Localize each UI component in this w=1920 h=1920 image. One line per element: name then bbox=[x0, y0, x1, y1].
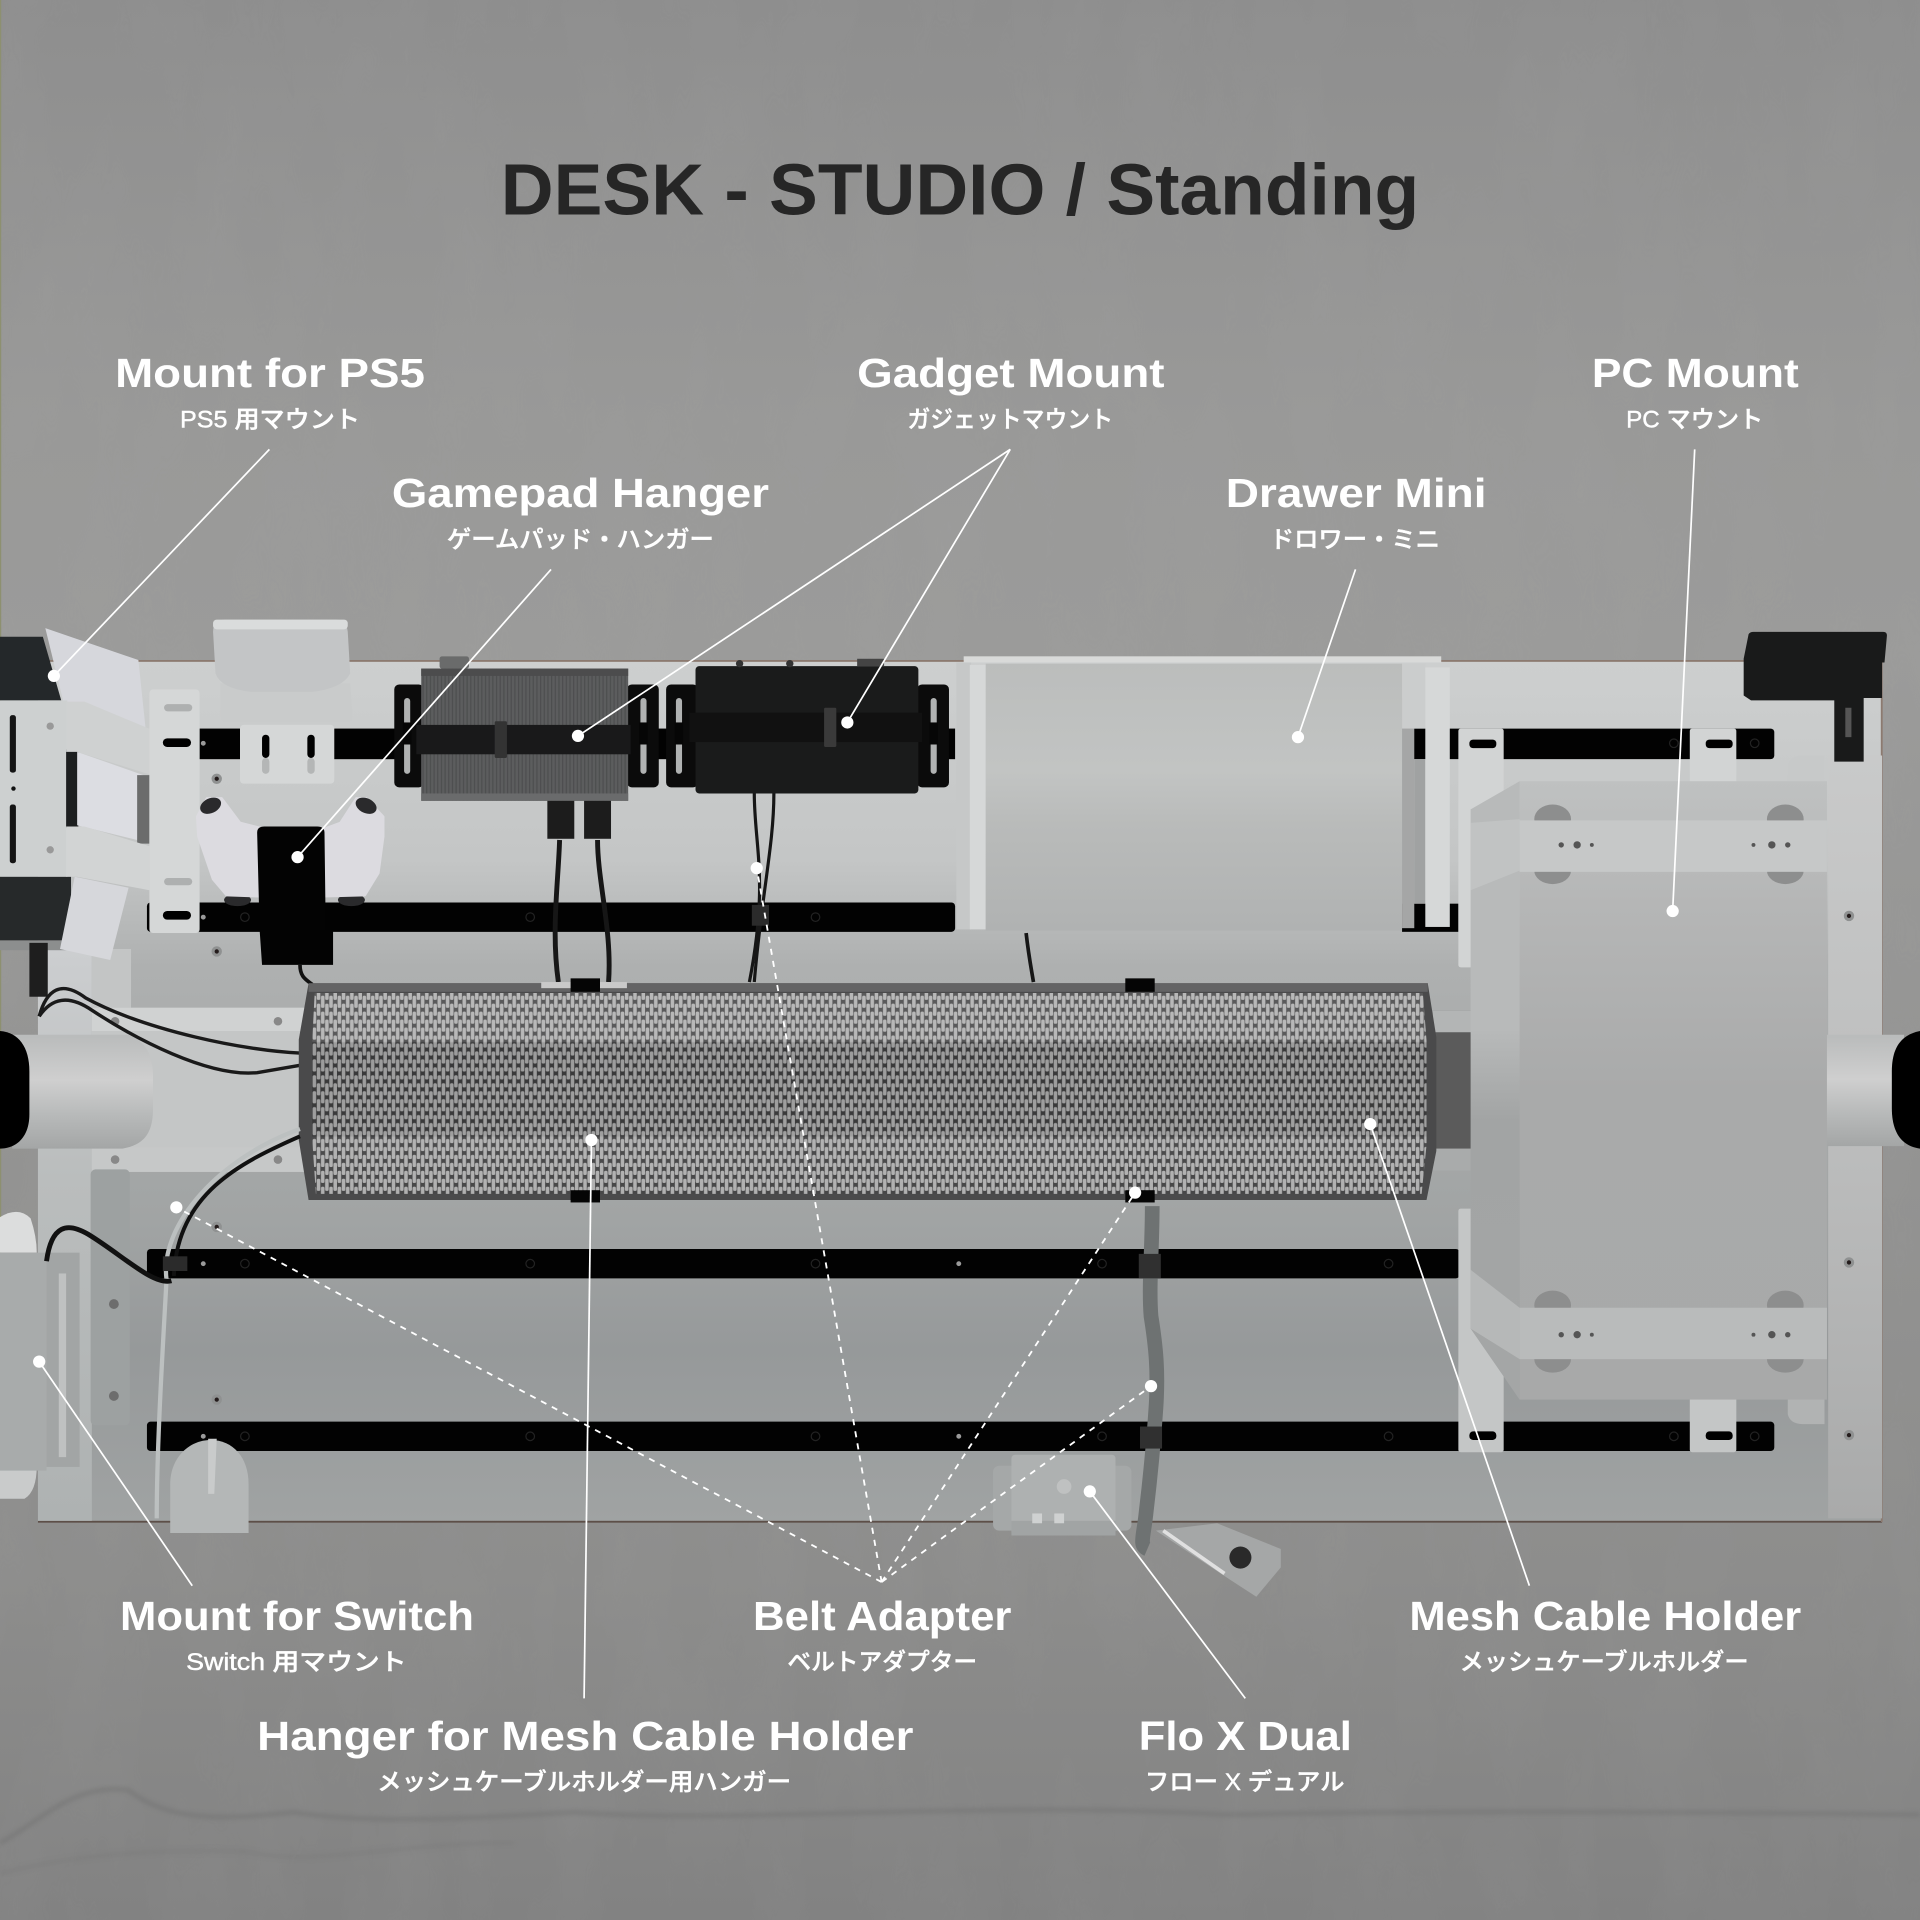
label: Gadget Mount: Gadget Mount bbox=[857, 350, 1164, 396]
label: PC Mount: PC マウント bbox=[1626, 406, 1763, 433]
icon: drawer mini bbox=[956, 656, 1450, 931]
label: Hanger for Mesh Cable Holder bbox=[257, 1713, 914, 1796]
label: Gadget Mount: ガジェットマウント bbox=[907, 406, 1113, 433]
label: Drawer Mini: ドロワー・ミニ bbox=[1270, 526, 1440, 553]
icon: top wall bracket bbox=[213, 620, 353, 784]
label: Flo X Dual bbox=[1139, 1713, 1352, 1796]
label: Mesh Cable Holder bbox=[1409, 1593, 1802, 1676]
icon: mounting plate with keyholes bbox=[149, 689, 200, 933]
label: Belt Adapter: ベルトアダプター bbox=[787, 1649, 977, 1676]
label: PC Mount bbox=[1592, 350, 1799, 433]
label: Drawer Mini bbox=[1226, 470, 1487, 553]
label: Gadget Mount bbox=[857, 350, 1164, 433]
standing leg tube right bbox=[1819, 1031, 1920, 1149]
callout dots bbox=[33, 670, 1679, 1498]
label: Gamepad Hanger bbox=[392, 470, 769, 553]
leader: Mount for Switch bbox=[39, 1362, 192, 1586]
desk leg cross beam bbox=[92, 1008, 1474, 1172]
icon: side cables bbox=[39, 989, 300, 1073]
leader: Mount for PS5 bbox=[54, 449, 269, 676]
icon: flexible leg bracket bbox=[1744, 632, 1887, 762]
icon: power connector bbox=[1156, 1523, 1281, 1597]
icon: black gadget box bbox=[689, 659, 922, 793]
icon: gadget brackets bbox=[394, 684, 949, 787]
icon: gamepad on hanger bbox=[197, 794, 383, 984]
icon: PC mount bbox=[1471, 781, 1827, 1400]
label: Drawer Mini: Drawer Mini bbox=[1226, 470, 1487, 516]
desk frame legs and rails bbox=[38, 729, 1882, 1521]
icon: switch mount bbox=[0, 1169, 130, 1499]
title: DESK - STUDIO / Standing bbox=[501, 150, 1419, 230]
leader: Flo X Dual bbox=[1090, 1491, 1245, 1698]
icon: Flo X dual bbox=[993, 1455, 1131, 1536]
label: Mount for PS5 bbox=[115, 350, 425, 433]
label: Flo X Dual: Flo X Dual bbox=[1139, 1713, 1352, 1759]
desk top panel bbox=[0, 0, 1883, 1523]
label: Belt Adapter: Belt Adapter bbox=[753, 1593, 1012, 1639]
icon: cables from gadgets bbox=[547, 793, 1033, 982]
leader: Gamepad Hanger bbox=[298, 569, 551, 857]
leader: Belt Adapter dashed lines bbox=[176, 868, 1151, 1582]
label: Gamepad Hanger: Gamepad Hanger bbox=[392, 470, 769, 516]
label: Mount for Switch: Mount for Switch bbox=[120, 1593, 474, 1639]
label: Belt Adapter bbox=[753, 1593, 1012, 1676]
label: Mount for Switch bbox=[120, 1593, 474, 1676]
icon: cable clamp bbox=[170, 1439, 249, 1533]
callout lines and dots bbox=[33, 449, 1695, 1698]
label: Gamepad Hanger: ゲームパッド・ハンガー bbox=[447, 526, 714, 553]
label: Mount for PS5: Mount for PS5 bbox=[115, 350, 425, 396]
leader: Mesh Cable Holder bbox=[1370, 1124, 1529, 1586]
leader: Hanger for Mesh Cable Holder bbox=[584, 1140, 591, 1698]
label: Mount for Switch: Switch 用マウント bbox=[186, 1649, 407, 1676]
label: Mesh Cable Holder: Mesh Cable Holder bbox=[1409, 1593, 1802, 1639]
label: Hanger for Mesh Cable Holder: Hanger for Mesh Cable Holder bbox=[257, 1713, 914, 1759]
label: Hanger for Mesh Cable Holder: メッシュケーブルホルダー用ハンガー bbox=[377, 1768, 791, 1796]
standing leg tube left bbox=[0, 1031, 153, 1149]
icon: gray gadget box bbox=[416, 656, 631, 801]
leader: PC Mount bbox=[1673, 449, 1695, 911]
icon: PS5 console with mount bbox=[0, 628, 152, 997]
leader: Drawer Mini bbox=[1298, 569, 1356, 737]
icon: right bracket plates bbox=[1458, 729, 1824, 1452]
icon: grey cable bbox=[1139, 1206, 1162, 1549]
icon: left lower cables bbox=[47, 1129, 300, 1518]
icon: mesh cable holder bbox=[299, 978, 1436, 1202]
label: Mesh Cable Holder: メッシュケーブルホルダー bbox=[1460, 1648, 1749, 1676]
label: Flo X Dual: フロー X デュアル bbox=[1145, 1768, 1344, 1796]
label: PC Mount: PC Mount bbox=[1592, 350, 1799, 396]
leader: Gadget Mount bbox=[578, 449, 1010, 736]
label: Mount for PS5: PS5 用マウント bbox=[180, 406, 360, 433]
